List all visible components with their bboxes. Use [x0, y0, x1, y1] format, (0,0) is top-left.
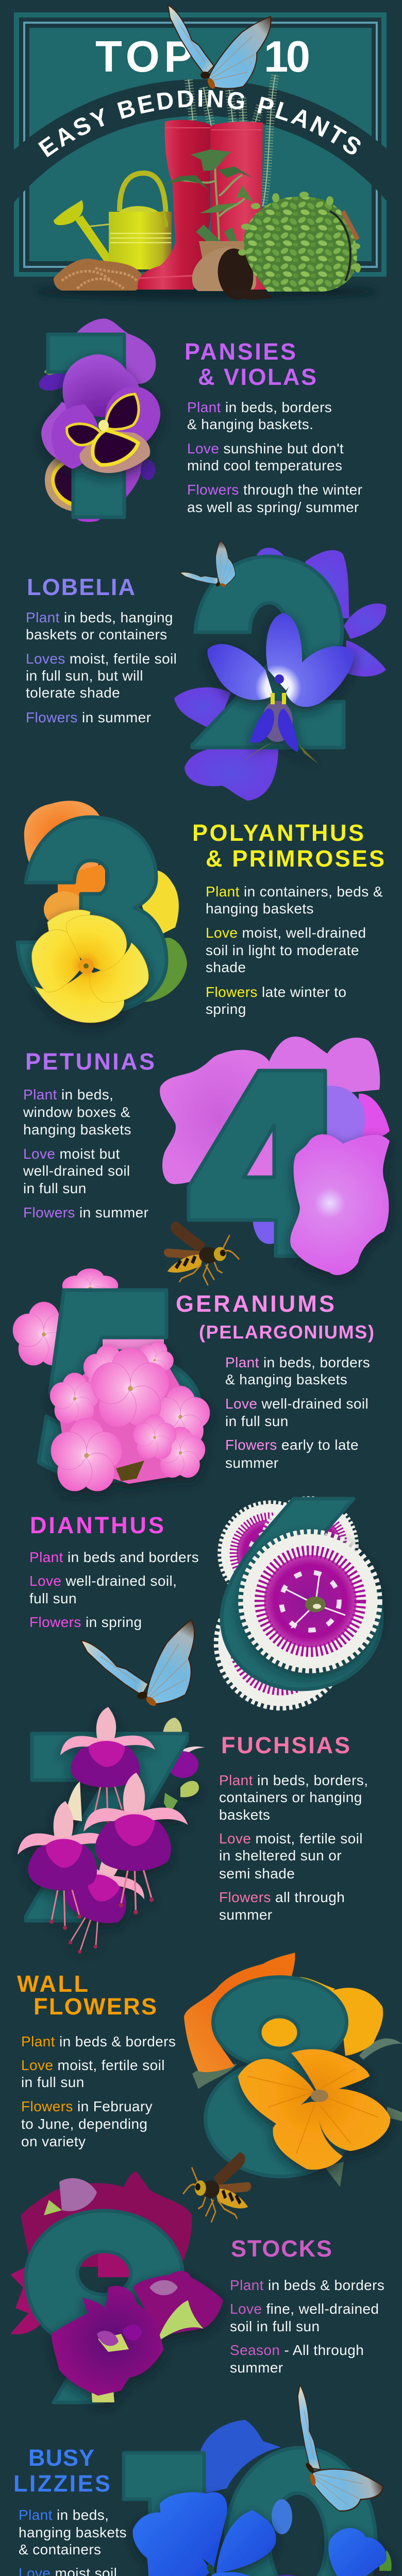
planting notes: in full sun: [21, 2074, 85, 2090]
planting notes: Flowers in summer: [23, 1205, 148, 1221]
heading: DIANTHUS: [30, 1512, 164, 1538]
panel: polyanthus and primroses: [18, 801, 384, 1023]
heading: (PELARGONIUMS): [199, 1321, 374, 1343]
icon: wasp: [164, 1222, 239, 1285]
planting notes: [225, 1354, 370, 1471]
planting notes: Love moist, well-drained: [206, 925, 366, 941]
flowers behind number: [24, 801, 187, 1002]
primrose flower: [32, 910, 148, 1023]
planting notes: Flowers through the winter: [187, 482, 362, 498]
planting notes: summer: [230, 2360, 283, 2376]
planting notes: Love moist, fertile soil: [21, 2057, 165, 2073]
planting notes: Plant in beds,: [19, 2507, 109, 2523]
flowers behind number: [174, 548, 386, 801]
planting notes: summer: [225, 1455, 279, 1471]
heading: WALL: [17, 1971, 88, 1997]
heading: [185, 338, 316, 390]
planting notes: [23, 1087, 148, 1221]
bud and stem behind number: [163, 1718, 205, 1778]
planting notes: baskets: [219, 1807, 270, 1823]
planting notes: Plant in beds,: [23, 1087, 113, 1103]
planting notes: & hanging baskets: [225, 1371, 347, 1387]
planting notes: Love fine, well-drained: [230, 2301, 379, 2317]
planting notes: Season - All through: [230, 2342, 364, 2358]
panel: pansies and violas: [36, 318, 362, 522]
planting notes: hanging baskets: [23, 1122, 131, 1138]
panel: geraniums: [13, 1268, 374, 1491]
planting notes: well-drained soil: [23, 1163, 130, 1179]
icon: butterfly: [168, 5, 271, 90]
heading: STOCKS: [231, 2235, 332, 2262]
wallflower: [238, 2049, 390, 2170]
planting notes: full sun: [29, 1590, 77, 1606]
illustration: rope: [54, 259, 142, 291]
planting notes: window boxes &: [23, 1104, 130, 1120]
planting notes: to June, depending: [21, 2116, 147, 2132]
planting notes: soil in light to moderate: [206, 942, 359, 958]
planting notes: Plant in beds & borders: [230, 2277, 384, 2293]
illustration: peat pots: [192, 241, 273, 302]
heading: [176, 1291, 374, 1343]
planting notes: Flowers early to late: [225, 1437, 359, 1453]
fuchsia flowers: [18, 1707, 199, 1968]
heading: LIZZIES: [13, 2470, 110, 2497]
icon: butterfly: [81, 1609, 215, 1721]
planting notes: [21, 2033, 176, 2149]
panel: wallflowers: [17, 1953, 402, 2223]
planting notes: Plant in beds and borders: [29, 1549, 199, 1565]
dianthus flower: [241, 1532, 379, 1670]
flowers behind number: [36, 318, 156, 522]
numeral 9: [26, 2211, 183, 2402]
heading: & PRIMROSES: [206, 845, 384, 872]
planting notes: & hanging baskets.: [187, 416, 313, 432]
planting notes: in full sun: [23, 1180, 87, 1196]
planting notes: Plant in beds & borders: [21, 2033, 176, 2049]
planting notes: Flowers in spring: [29, 1614, 142, 1630]
planting notes: Love sunshine but don't: [187, 440, 344, 456]
planting notes: containers or hanging: [219, 1789, 362, 1805]
arch banner: [14, 79, 388, 202]
planting notes: Love moist but: [23, 1146, 120, 1162]
heading: FLOWERS: [34, 1993, 157, 2020]
planting notes: as well as spring/ summer: [187, 499, 359, 515]
planting notes: summer: [219, 1907, 273, 1923]
illustration: rosemary sprigs: [189, 75, 275, 206]
icon: butterfly: [180, 536, 246, 603]
flowers behind number: [199, 2420, 281, 2494]
impatiens flowers: [132, 2492, 400, 2576]
planting notes: mind cool temperatures: [187, 457, 342, 473]
numeral 10: [124, 2448, 376, 2576]
geranium cluster: [50, 1335, 210, 1491]
pansy flower: [41, 354, 160, 473]
illustration: watering can: [54, 173, 172, 269]
planting notes: [187, 399, 362, 515]
planting notes: Love moist, fertile soil: [219, 1831, 363, 1846]
panel: petunias: [23, 1037, 390, 1285]
heading: BUSY: [28, 2445, 94, 2471]
planting notes: [19, 2507, 127, 2576]
planting notes: Love well-drained soil,: [29, 1573, 177, 1589]
heading: GERANIUMS: [176, 1291, 334, 1317]
planting notes: Plant in beds, borders,: [219, 1772, 368, 1788]
planting notes: Plant in beds, borders: [187, 399, 332, 415]
planting notes: [219, 1772, 368, 1923]
flowers behind number: [160, 1037, 390, 1244]
heading: FUCHSIAS: [221, 1732, 350, 1758]
planting notes: spring: [206, 1001, 246, 1017]
title: top 10: TOP: [95, 32, 193, 81]
numeral 1: [48, 334, 124, 517]
planting notes: on variety: [21, 2133, 86, 2149]
planting notes: [26, 609, 177, 725]
planting notes: in full sun, but will: [26, 668, 143, 684]
planting notes: hanging baskets: [19, 2524, 127, 2540]
planting notes: semi shade: [219, 1866, 295, 1882]
panel: busy lizzies: [13, 2385, 400, 2576]
planting notes: Plant in beds, hanging: [26, 609, 173, 625]
planting notes: Plant in beds, borders: [225, 1354, 370, 1370]
decorative frame: [14, 12, 387, 277]
planting notes: Flowers in February: [21, 2098, 153, 2114]
subtitle: easy bedding plants: EASY BEDDING PLANTS: [38, 90, 361, 158]
planting notes: soil in full sun: [230, 2318, 320, 2334]
heading: [192, 820, 384, 872]
illustration: red boots: [138, 120, 308, 290]
flowers behind number: [13, 1268, 164, 1370]
planting notes: hanging baskets: [206, 901, 314, 917]
planting notes: Loves moist, fertile soil: [26, 651, 177, 667]
numeral 6: [222, 1499, 382, 1689]
heading: LOBELIA: [27, 574, 135, 600]
panel: fuchsias: [18, 1707, 368, 1968]
numeral 4: [189, 1071, 325, 1256]
heading: [13, 2445, 110, 2497]
flowers behind number: [217, 1498, 357, 1707]
title: top 10: 10: [264, 32, 310, 81]
planting notes: Plant in containers, beds &: [206, 884, 383, 900]
petunia flower: [290, 1134, 390, 1275]
planting notes: in full sun: [225, 1413, 289, 1429]
numeral 8: [207, 1979, 355, 2175]
planting notes: Flowers all through: [219, 1889, 345, 1905]
lobelia flower: [207, 613, 354, 764]
illustration: potted herb: [238, 192, 361, 292]
header: [14, 4, 387, 301]
icon: butterfly: [274, 2385, 387, 2538]
heading: PETUNIAS: [25, 1048, 155, 1075]
ground shadow: [36, 283, 376, 300]
planting notes: [206, 884, 383, 1017]
heading: [17, 1971, 157, 2020]
planting notes: in sheltered sun or: [219, 1848, 342, 1863]
heading: & VIOLAS: [198, 364, 316, 390]
planting notes: shade: [206, 959, 246, 975]
panel: lobelia: [26, 536, 386, 801]
planting notes: & containers: [19, 2541, 101, 2557]
flowers and leaves behind number: [184, 1953, 402, 2187]
numeral 5: [39, 1290, 201, 1481]
illustration: seedling: [164, 149, 254, 242]
planting notes: baskets or containers: [26, 626, 167, 642]
panel: dianthus: [29, 1498, 382, 1721]
numeral 3: [18, 817, 166, 1013]
numeral 7: [26, 1734, 187, 1921]
heading: POLYANTHUS: [192, 820, 364, 846]
panel: stocks: [10, 2172, 384, 2402]
icon: wasp: [183, 2153, 251, 2223]
planting notes: Love well-drained soil: [225, 1396, 368, 1412]
heading: PANSIES: [185, 338, 296, 365]
stock flowers: [52, 2271, 223, 2402]
title: top 10: [95, 32, 310, 81]
numeral 2: [192, 556, 344, 748]
planting notes: Flowers late winter to: [206, 984, 346, 1000]
planting notes: tolerate shade: [26, 685, 120, 701]
planting notes: Flowers in summer: [26, 709, 151, 725]
planting notes: [230, 2277, 384, 2376]
planting notes: [29, 1549, 199, 1630]
flowers behind number: [10, 2172, 192, 2334]
